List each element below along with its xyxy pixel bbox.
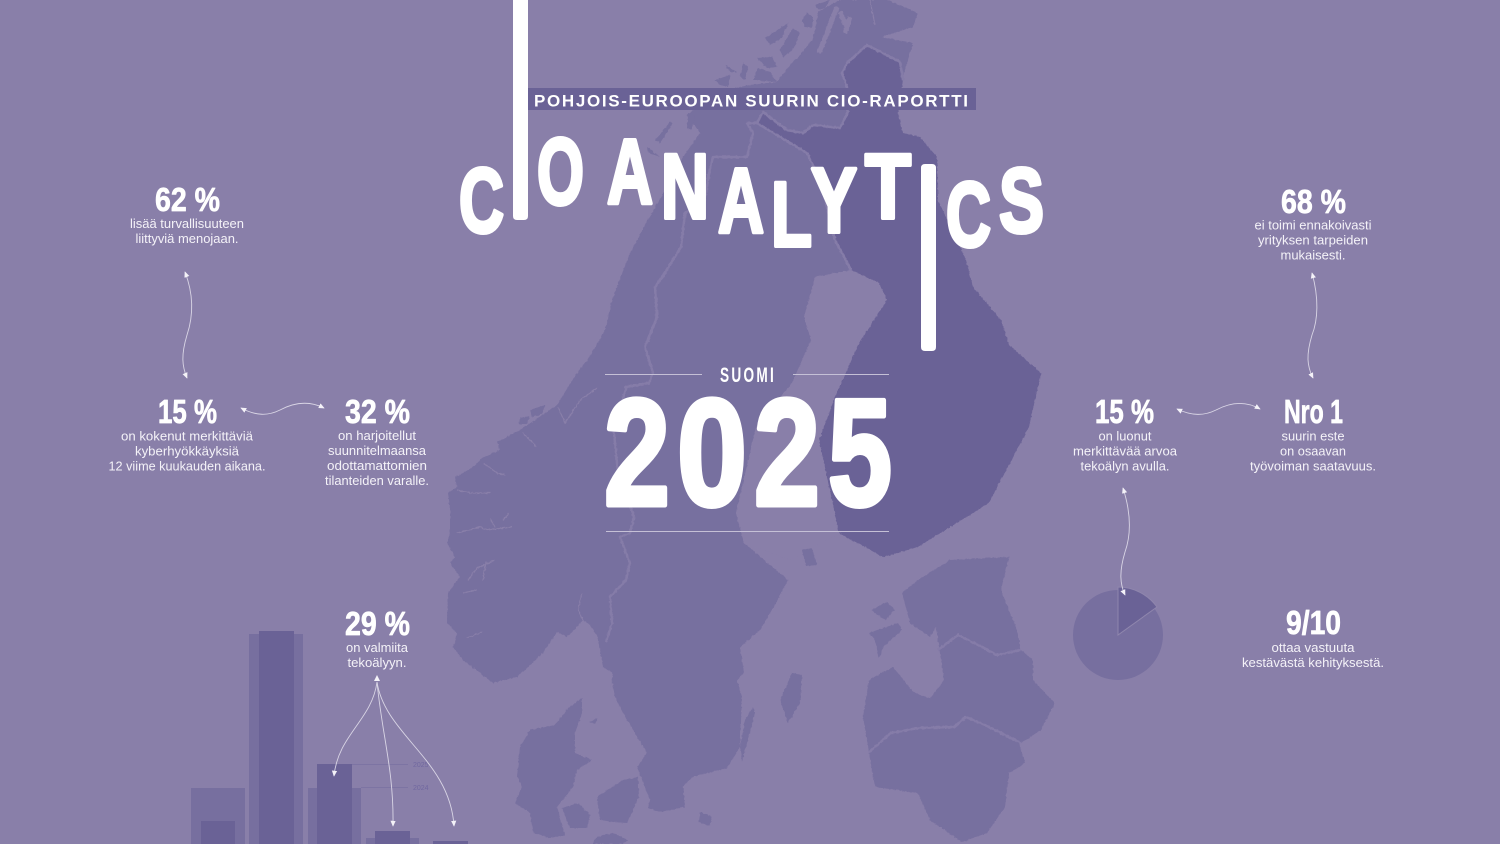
stat: 9/10: kestävästä kehityksestä. (1242, 655, 1384, 670)
stat: 9/10: ottaa vastuuta (1272, 640, 1355, 655)
arrows: 29 % to bars (334, 675, 454, 826)
country label: SUOMI (720, 363, 776, 387)
stat: Nro 1: Nro 1 (1284, 393, 1343, 430)
stat: 68 %: mukaisesti. (1280, 248, 1346, 262)
bar group 5 (433, 841, 468, 844)
map of the Nordic and Baltic countries (447, 0, 1055, 844)
stat: 15 % AI value: 15 % (1095, 393, 1154, 430)
stat: 32 %: 32 % (345, 393, 410, 430)
stat: 29 %: on valmiita (346, 640, 409, 655)
map: Norway and Sweden (447, 0, 927, 812)
map: Baltic borders (869, 635, 1021, 752)
map: Estonia and Latvia (863, 557, 1055, 752)
legend: years: 2025 (413, 762, 429, 769)
legend: years: 2024 (413, 785, 429, 792)
stat: 62 % (130, 181, 244, 246)
title: N (661, 136, 709, 238)
bar group 3 (308, 764, 361, 844)
title: T (865, 136, 911, 238)
pie chart (1073, 587, 1163, 680)
year: 0 (677, 368, 747, 538)
stat: 68 %: yrityksen tarpeiden (1258, 232, 1368, 248)
title: S (999, 150, 1044, 252)
stat: Nro 1: työvoiman saatavuus. (1250, 458, 1376, 474)
arrow: 15 % to 32 % (241, 403, 324, 414)
year: 2 (754, 368, 820, 538)
stat: 62 %: lisää turvallisuuteen (130, 216, 244, 231)
arrow: 15 % to Nro 1 (1177, 403, 1260, 414)
stat: 68 % (1254, 183, 1372, 262)
bar group 1 (191, 788, 245, 844)
stat: 68 %: ei toimi ennakoivasti (1254, 218, 1372, 232)
stat: 29 %: 29 % (345, 605, 410, 642)
stat: 9/10: 9/10 (1286, 604, 1341, 641)
map: Gulf of Bothnia (736, 270, 887, 560)
stat: 15 % AI value: on luonut (1098, 428, 1152, 444)
stat: 32 % (325, 393, 429, 488)
legend: years (352, 762, 429, 792)
bar group 2 (249, 631, 303, 844)
stat: 15 % cyber attacks: on kokenut merkittäviä (121, 428, 254, 444)
stat: Nro 1: on osaavan (1280, 444, 1346, 458)
stat: 15 % cyber attacks: 15 % (158, 393, 217, 430)
map: fjords (457, 0, 875, 750)
bar group 4 (366, 831, 419, 844)
stat: 15 % AI value: merkittävää arvoa (1073, 444, 1178, 458)
arrow: 68 % to Nro 1 (1308, 273, 1317, 378)
title: O (537, 119, 584, 225)
title: A (718, 150, 764, 252)
stat: 29 % (345, 605, 410, 670)
stat: 32 %: tilanteiden varalle. (325, 473, 429, 488)
map: national borders (606, 45, 903, 642)
year: 2 (604, 368, 670, 538)
title: C (459, 150, 504, 252)
stat: 32 %: suunnitelmaansa (328, 443, 427, 458)
title: A (607, 121, 653, 223)
title: Y (811, 150, 857, 252)
vertical bar of title letter I (513, 0, 528, 220)
stat: 15 % AI value (1073, 393, 1178, 474)
stat: 15 % cyber attacks: 12 viime kuukauden aikana. (108, 458, 266, 474)
map: Finland (757, 45, 1041, 557)
stat: 32 %: on harjoitellut (338, 428, 416, 443)
arrow: 15 % to pie chart (1121, 488, 1129, 595)
map: Lithuania (869, 717, 1025, 842)
stat: Nro 1: suurin este (1282, 428, 1344, 444)
stat: 9/10 (1242, 604, 1384, 670)
stat: 15 % AI value: tekoälyn avulla. (1080, 458, 1170, 474)
subtitle: POHJOIS-EUROOPAN SUURIN CIO-RAPORTTI (534, 92, 968, 110)
stat: 29 %: tekoälyyn. (348, 655, 406, 670)
stat: 62 %: 62 % (155, 181, 220, 218)
title: C (946, 164, 991, 266)
bar chart (191, 631, 468, 844)
stat: 32 %: odottamattomien (327, 458, 427, 473)
year (604, 368, 892, 538)
stat: 15 % cyber attacks (108, 393, 266, 474)
arrow: 62 % to 15 % (183, 272, 192, 378)
stat: 68 %: 68 % (1281, 183, 1346, 220)
stat: 62 %: liittyviä menojaan. (136, 231, 238, 246)
map: islands (589, 548, 902, 826)
title (459, 119, 1044, 351)
stat: 15 % cyber attacks: kyberhyökkäyksiä (135, 444, 240, 458)
map: Denmark (515, 698, 639, 844)
title: L (771, 164, 812, 266)
year: 5 (828, 368, 892, 538)
stat: Nro 1 (1250, 393, 1376, 474)
map: Norwegian coastal islands (519, 0, 830, 424)
